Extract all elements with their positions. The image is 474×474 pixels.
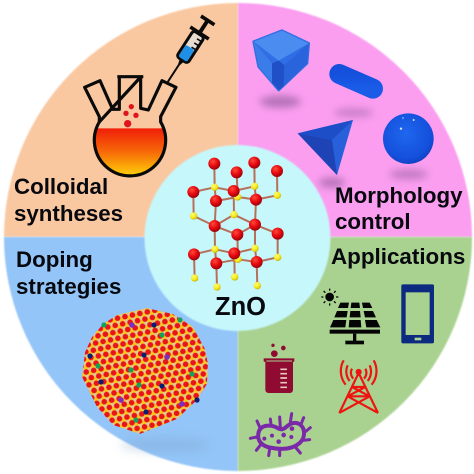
icon: solar panel — [321, 289, 380, 344]
heading: doping strategies: Doping — [16, 247, 93, 272]
nanoparticle shapes — [254, 31, 434, 188]
heading line two: syntheses — [14, 201, 123, 226]
heading: morphology control: Morphology — [335, 183, 463, 208]
icon: rod — [339, 74, 373, 89]
icon: bacterium — [250, 414, 310, 456]
center circle: ZnO — [144, 145, 330, 331]
panel: morphology control — [238, 3, 472, 237]
ZnO crystal structure — [187, 157, 284, 291]
particle shadow — [120, 438, 210, 452]
heading line two: strategies — [16, 274, 121, 299]
heading: colloidal syntheses: Colloidal — [14, 174, 108, 199]
icon: radio tower — [339, 360, 378, 413]
icon: tetrahedron — [298, 120, 353, 175]
icon: three-neck flask — [85, 77, 176, 176]
heading line two: control — [335, 209, 411, 234]
doped nanocrystal lattice — [82, 308, 208, 434]
panel: colloidal syntheses — [4, 3, 238, 237]
icon: smartphone — [401, 284, 434, 343]
icon: syringe — [159, 13, 218, 88]
panel: applications — [238, 237, 472, 471]
icon: cube — [254, 31, 309, 90]
heading: applications: Applications — [331, 244, 465, 269]
icon: beaker — [264, 344, 294, 393]
panel: doping strategies — [4, 237, 238, 471]
heading: ZnO: ZnO — [215, 293, 266, 321]
icon: sphere — [383, 113, 434, 164]
